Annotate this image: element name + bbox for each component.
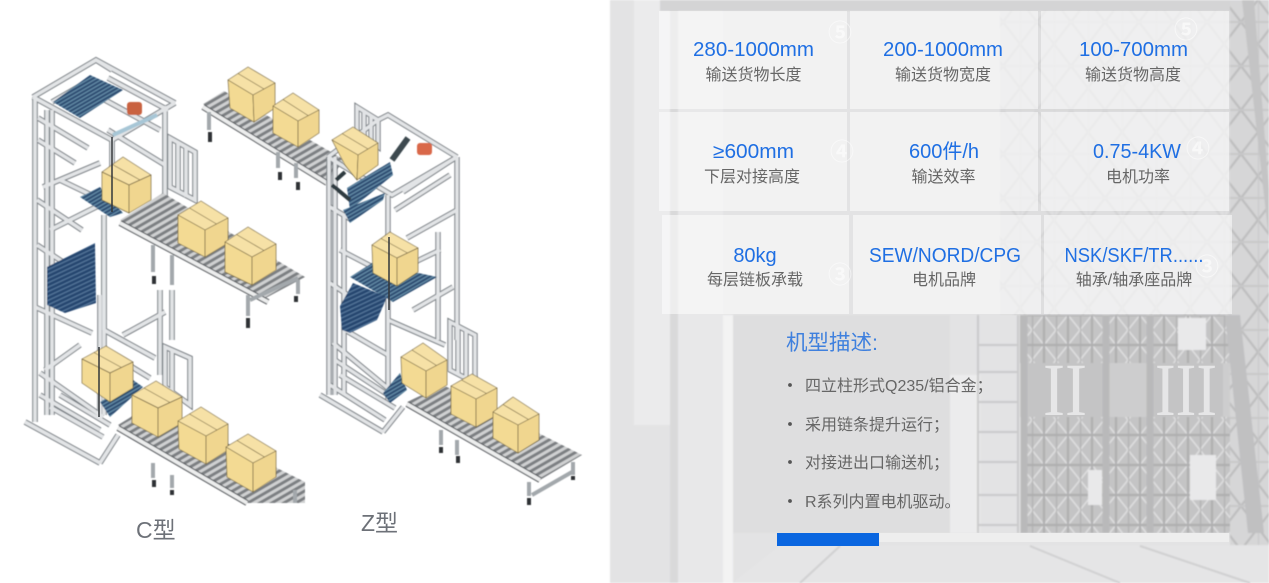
lower blue slat deck xyxy=(100,380,143,417)
spec card: lower docking height: 下层对接高度 xyxy=(704,168,800,186)
spec card: motor brands xyxy=(853,215,1041,314)
background: circled numbers: ④ xyxy=(1186,136,1210,163)
spec card: bearing brands: 轴承/轴承座品牌 xyxy=(1076,271,1192,289)
top blue slat deck xyxy=(53,75,123,118)
spec card: goods length: 280-1000mm xyxy=(693,39,814,61)
Z hanging blue chain slats xyxy=(340,283,387,333)
spec card: load per slat layer xyxy=(662,215,849,314)
spec card: lower docking height: ≥600mm xyxy=(713,141,794,163)
background: mid lattice band xyxy=(1020,363,1230,417)
background: circled numbers: ③ xyxy=(1195,254,1219,281)
background: dark vertical columns xyxy=(1024,315,1150,533)
spec card: motor brands: 电机品牌 xyxy=(912,271,976,289)
spec card: goods length: 输送货物长度 xyxy=(705,66,802,84)
hanging blue chain slats xyxy=(47,243,96,313)
label: C type: C型 xyxy=(136,517,176,543)
background: numeral II: II xyxy=(1043,349,1087,432)
panel: warehouse photo background xyxy=(610,0,1269,583)
background: circled numbers: ③ xyxy=(828,262,852,289)
orange motor xyxy=(127,102,142,115)
diagram: C-type upper outfeed conveyor xyxy=(120,193,305,328)
spec card: goods width: 输送货物宽度 xyxy=(895,66,991,84)
dark front posts xyxy=(99,137,389,417)
background: upper right beam xyxy=(1242,0,1269,240)
background: numeral III: III xyxy=(1155,349,1217,432)
description bullet list: 对接进出口输送机； xyxy=(805,454,949,472)
Z top blue slat decks xyxy=(347,162,393,210)
background: numeral panel II xyxy=(1027,363,1103,417)
background: upper lattice strip xyxy=(660,0,1230,11)
spec card: goods length xyxy=(659,11,847,109)
light blue drive shaft xyxy=(113,115,157,135)
spec card: goods height: 输送货物高度 xyxy=(1085,66,1181,84)
spec card: motor brands: SEW/NORD/CPG xyxy=(869,245,1021,267)
background: floor xyxy=(733,546,1269,583)
panel: white diagram background xyxy=(0,0,610,583)
background: dark diagonal column xyxy=(1225,315,1264,533)
spec card: lower docking height xyxy=(659,112,847,211)
spec card: throughput: 600件/h xyxy=(909,140,979,163)
background: circled numbers: ④ xyxy=(830,139,854,166)
diagram: Z-type upper infeed conveyor xyxy=(203,91,345,190)
mid blue slat deck xyxy=(80,187,123,217)
background: bright lattice windows xyxy=(1088,318,1216,505)
spec card: bearing brands xyxy=(1044,215,1232,314)
cargo boxes: C-type upper xyxy=(102,157,276,285)
diagram: Z-type lower outfeed conveyor xyxy=(407,385,582,505)
background: ladder xyxy=(978,315,1018,533)
background: circled numbers: ⑤ xyxy=(1174,17,1198,44)
Z lower blue slat deck xyxy=(383,373,407,403)
spec card: throughput xyxy=(850,112,1038,211)
heading: model description: 机型描述: xyxy=(786,331,878,355)
Z dark drive machinery xyxy=(332,172,350,200)
cargo boxes: Z-type middle and lower xyxy=(372,232,539,453)
background: lower lattice xyxy=(1027,417,1232,533)
diagram: C-type lifter frame xyxy=(25,60,195,463)
spec card: motor power: 电机功率 xyxy=(1106,168,1170,186)
background: circled numbers xyxy=(828,17,1219,289)
Z orange motor xyxy=(417,143,432,155)
spec card: goods width xyxy=(850,11,1038,109)
background: numeral panel III xyxy=(1153,363,1223,417)
Z drive chain xyxy=(392,138,408,160)
spec card: goods height: 100-700mm xyxy=(1079,39,1188,61)
cargo boxes: Z-type upper xyxy=(228,67,378,180)
progress bar xyxy=(777,533,1229,546)
spec card: motor power: 0.75-4KW xyxy=(1093,141,1181,163)
diagram: C-type lower outfeed conveyor xyxy=(118,405,305,503)
description bullet list xyxy=(788,377,993,511)
description bullet list: 采用链条提升运行； xyxy=(805,416,949,434)
spec card: goods height xyxy=(1041,11,1229,109)
spec card: load per slat layer: 每层链板承载 xyxy=(707,271,803,289)
spec card: bearing brands: NSK/SKF/TR...... xyxy=(1064,245,1204,267)
background: circled numbers: ⑤ xyxy=(828,20,852,47)
background: right lattice xyxy=(1230,0,1269,545)
spec card: load per slat layer: 80kg xyxy=(733,245,777,267)
background: behind cards texture xyxy=(1000,11,1230,315)
background: upper lattice xyxy=(1020,315,1230,363)
label: Z type: Z型 xyxy=(361,510,398,536)
Z mid blue slat deck xyxy=(350,263,437,302)
spec card: motor power xyxy=(1041,112,1229,211)
description bullet list: R系列内置电机驱动。 xyxy=(805,493,961,511)
cargo boxes: C-type lower xyxy=(82,346,276,492)
description bullet list: 四立柱形式Q235/铝合金； xyxy=(805,377,993,395)
spec card: throughput: 输送效率 xyxy=(911,168,976,186)
spec card: goods width: 200-1000mm xyxy=(883,39,1003,61)
diagram: Z-type lifter frame xyxy=(320,107,475,432)
